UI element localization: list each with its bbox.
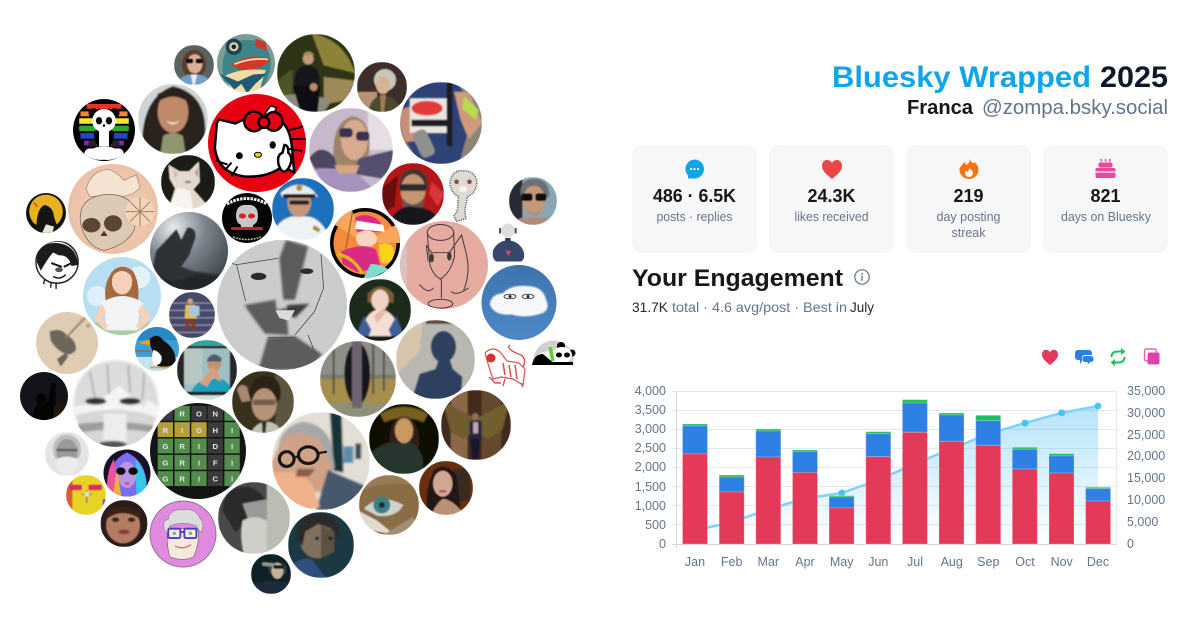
icon: flame bbox=[960, 159, 978, 179]
avatar: purple cartoon with blue glasses bbox=[150, 500, 216, 568]
panel: day posting streak bbox=[906, 145, 1031, 253]
stat label second line: streak bbox=[952, 226, 986, 240]
left axis labels: 2,000 bbox=[635, 460, 666, 474]
right axis labels: 20,000 bbox=[1127, 449, 1165, 463]
avatar: cat and wine glass tattoo bbox=[400, 221, 488, 309]
avatar: wordle grid: I bbox=[198, 475, 200, 484]
left axis labels bbox=[635, 384, 666, 551]
avatar: wordle grid: G bbox=[162, 475, 168, 484]
avatar: elderly bearded man in grayscale bbox=[45, 432, 89, 476]
user handle bbox=[907, 97, 1168, 119]
engagement summary: 31.7K bbox=[632, 299, 669, 315]
stat value: 486 · 6.5K bbox=[653, 186, 736, 206]
right axis labels: 30,000 bbox=[1127, 406, 1165, 420]
icon: cake bbox=[1096, 159, 1116, 178]
avatar: woman with sunglasses bbox=[174, 45, 214, 85]
month labels: Mar bbox=[758, 555, 779, 569]
avatar: wordle grid: G bbox=[162, 458, 168, 467]
right axis labels: 25,000 bbox=[1127, 428, 1165, 442]
engagement summary: total · 4.6 avg/post · Best in bbox=[672, 299, 847, 315]
avatar: wordle grid: R bbox=[179, 442, 185, 451]
month labels: Aug bbox=[941, 555, 963, 569]
month labels: Feb bbox=[721, 555, 743, 569]
avatar: bird on beige paper bbox=[36, 312, 98, 374]
avatar: wordle grid: I bbox=[231, 458, 233, 467]
avatar: bear hugging a tree bbox=[320, 341, 396, 417]
icon: heart bbox=[822, 160, 842, 179]
left axis labels: 4,000 bbox=[635, 384, 666, 398]
avatar: man with wings mural bbox=[441, 390, 511, 460]
avatar: emu sketch bbox=[450, 171, 477, 221]
avatar: wordle grid: R bbox=[163, 426, 169, 435]
right axis labels: 0 bbox=[1127, 537, 1134, 551]
avatar: wordle grid: O bbox=[196, 409, 202, 418]
avatar: wordle grid bbox=[150, 403, 246, 499]
left axis labels: 3,500 bbox=[635, 403, 666, 417]
avatar: wordle grid: I bbox=[181, 426, 183, 435]
avatar: penguin bbox=[135, 327, 179, 371]
avatar: anime boy bbox=[288, 512, 354, 578]
avatar: large picasso sketch bbox=[217, 240, 347, 370]
avatar: small robot bbox=[493, 224, 524, 262]
month labels: Jan bbox=[685, 555, 705, 569]
avatar: wordle grid: H bbox=[213, 426, 219, 435]
avatar: dark-haired woman in green bbox=[369, 404, 439, 474]
avatar cloud bbox=[20, 34, 576, 594]
avatar: wordle grid: C bbox=[213, 475, 219, 484]
avatar: person on stairs bbox=[169, 292, 215, 338]
cumulative area bbox=[695, 406, 1098, 544]
avatar: cloud with eyes bbox=[482, 265, 556, 340]
avatar: cyclist jersey bbox=[400, 82, 482, 164]
avatar: man on rock bbox=[277, 34, 355, 112]
avatar: silhouette against bright sky bbox=[150, 212, 228, 290]
chart legend bbox=[1042, 348, 1160, 366]
avatar: rainbow panda bbox=[73, 99, 135, 161]
stat value: 219 bbox=[954, 186, 984, 206]
right axis labels: 5,000 bbox=[1127, 515, 1158, 529]
avatar: yellow halo hooded figure bbox=[26, 193, 66, 233]
avatar: man on red background bbox=[382, 163, 444, 225]
month labels: Apr bbox=[795, 555, 815, 569]
title: Bluesky Wrapped bbox=[832, 61, 1091, 94]
right axis labels: 10,000 bbox=[1127, 493, 1165, 507]
avatar: frog illustration bbox=[217, 34, 275, 93]
month labels: Jun bbox=[868, 555, 888, 569]
avatar: red tiger drawing bbox=[485, 345, 525, 387]
title: 2025 bbox=[1100, 61, 1168, 94]
right axis labels: 15,000 bbox=[1127, 471, 1165, 485]
user handle: Franca bbox=[907, 97, 974, 119]
month labels: Sep bbox=[977, 555, 999, 569]
month labels: May bbox=[830, 555, 854, 569]
avatar: cartoon girl in white shirt bbox=[83, 257, 161, 335]
month labels: Oct bbox=[1015, 555, 1035, 569]
avatar: racer girl cartoon bbox=[330, 208, 400, 278]
engagement summary: July bbox=[850, 299, 874, 315]
left axis labels: 3,000 bbox=[635, 422, 666, 436]
chart: monthly engagement bbox=[635, 384, 1165, 569]
avatar: wordle grid: G bbox=[162, 442, 168, 451]
avatar: woman in purple with sunglasses bbox=[309, 108, 393, 192]
right axis labels: 35,000 bbox=[1127, 384, 1165, 398]
stat label: posts · replies bbox=[656, 210, 732, 224]
month labels: Jul bbox=[907, 555, 923, 569]
avatar: man with big white beard, profile bbox=[218, 482, 290, 554]
avatar: wordle grid: N bbox=[213, 409, 219, 418]
avatar: wordle grid: I bbox=[198, 458, 200, 467]
icon: quotes legend bbox=[1144, 349, 1160, 364]
left axis labels: 1,000 bbox=[635, 499, 666, 513]
avatar: wordle grid: D bbox=[213, 442, 219, 451]
avatar: naval captain bbox=[271, 178, 334, 240]
avatar: elderly woman bbox=[357, 62, 407, 112]
avatar: dark night silhouette bbox=[20, 372, 68, 420]
left axis labels: 2,500 bbox=[635, 441, 666, 455]
right axis labels bbox=[1127, 384, 1165, 551]
avatar: curly-haired woman bbox=[138, 84, 208, 154]
avatar: woman with necklace bbox=[419, 461, 473, 515]
month labels: Nov bbox=[1051, 555, 1074, 569]
avatar: lying panda on grey bbox=[532, 341, 576, 365]
avatar: hello kitty bbox=[208, 94, 306, 192]
heading: your engagement: Your Engagement bbox=[632, 265, 843, 292]
left axis labels: 0 bbox=[659, 537, 666, 551]
left axis labels: 1,500 bbox=[635, 480, 666, 494]
avatar: wordle grid: I bbox=[231, 475, 233, 484]
stacked bars bbox=[682, 400, 1111, 544]
panel: likes received bbox=[769, 145, 894, 253]
stat label: likes received bbox=[794, 210, 869, 224]
panel: posts and replies bbox=[632, 145, 757, 253]
avatar: cream cat bbox=[161, 155, 215, 209]
avatar: renaissance painting woman bbox=[349, 279, 411, 341]
icon: likes legend bbox=[1042, 350, 1058, 365]
avatar: shadow on wall bbox=[396, 320, 475, 399]
left axis labels: 500 bbox=[645, 518, 666, 532]
avatar: wordle grid: R bbox=[179, 409, 185, 418]
icon: reposts legend bbox=[1110, 348, 1126, 366]
avatar: eye close-up bbox=[359, 475, 419, 535]
avatar: thermal face bbox=[66, 475, 106, 515]
avatar: wordle grid: I bbox=[231, 426, 233, 435]
avatar: wordle grid: R bbox=[179, 458, 185, 467]
avatar: skull and rabbits drawing bbox=[68, 164, 158, 254]
avatar: grayscale hair and book bbox=[72, 359, 160, 448]
stat label: day posting bbox=[936, 210, 1001, 224]
avatar: man with sunglasses on beach bbox=[509, 177, 557, 225]
avatar: wordle grid: I bbox=[198, 442, 200, 451]
icon: info bbox=[855, 270, 869, 284]
avatar: wordle grid: G bbox=[196, 426, 202, 435]
month labels bbox=[685, 555, 1109, 569]
avatar: man with glasses, hand at temple bbox=[232, 371, 294, 433]
month labels: Dec bbox=[1087, 555, 1109, 569]
avatar: girl face close-up bbox=[100, 500, 148, 547]
icon: chat bubble bbox=[685, 160, 704, 178]
stat value: 24.3K bbox=[808, 186, 856, 206]
panel: days on Bluesky bbox=[1043, 145, 1168, 253]
avatar: small man with binoculars bbox=[251, 554, 291, 594]
avatar: man on laptop screen bbox=[177, 340, 237, 400]
cumulative line bbox=[695, 402, 1102, 530]
avatar: wordle grid: R bbox=[179, 475, 185, 484]
stat value: 821 bbox=[1090, 186, 1120, 206]
user handle: @zompa.bsky.social bbox=[982, 97, 1168, 119]
avatar: wordle grid: I bbox=[231, 442, 233, 451]
avatar: man with glasses, hand over mouth bbox=[272, 412, 370, 510]
avatar: comic sketch face bbox=[34, 241, 82, 289]
icon: replies legend bbox=[1075, 350, 1094, 364]
stat label: days on Bluesky bbox=[1061, 210, 1152, 224]
avatar: black and red skull badge bbox=[222, 193, 272, 243]
avatar: wordle grid: F bbox=[213, 458, 218, 467]
avatar: neon-haired girl with sunglasses bbox=[104, 450, 150, 496]
